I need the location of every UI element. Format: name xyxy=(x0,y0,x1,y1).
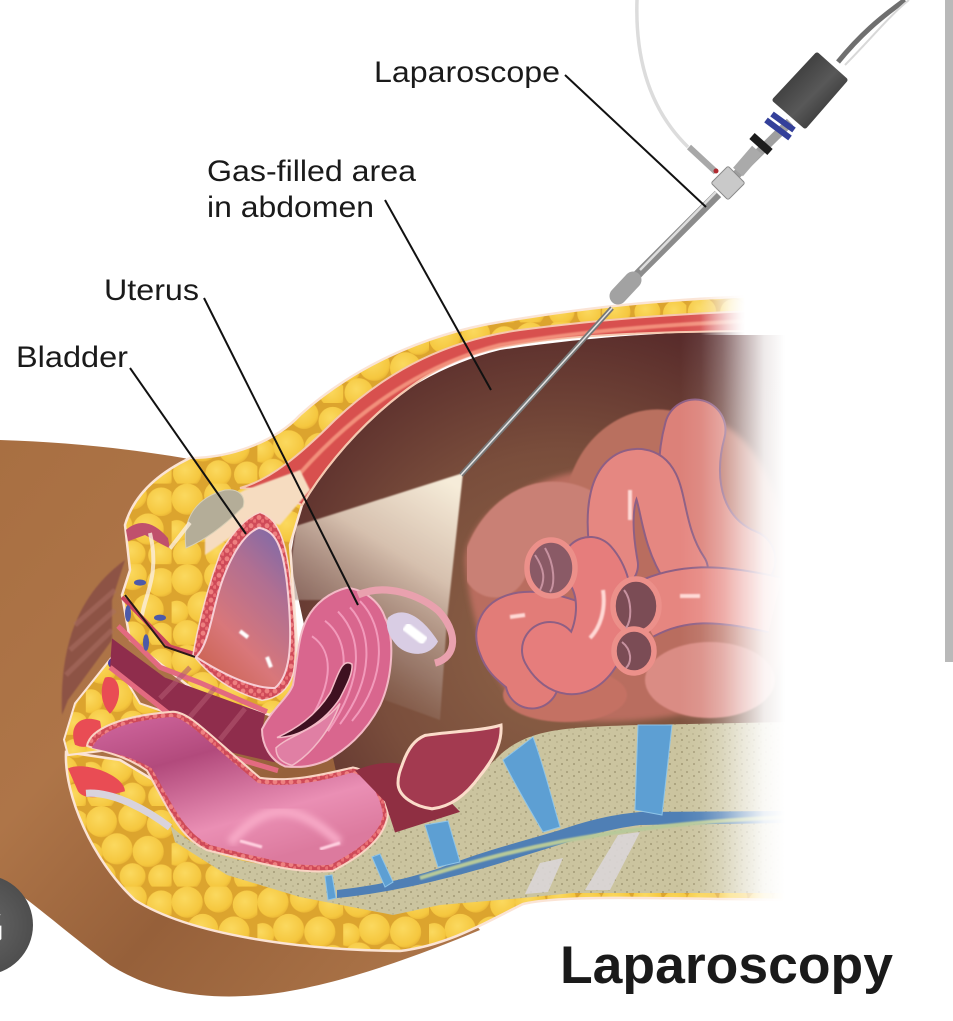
camera head xyxy=(775,55,845,126)
gas connector xyxy=(689,147,716,172)
small veins xyxy=(125,579,166,651)
bowel cut ends xyxy=(527,540,659,673)
intervertebral discs xyxy=(325,725,672,900)
back bowel mass xyxy=(465,414,790,722)
label: Bladder: Bladder xyxy=(16,341,128,374)
back bowel loops xyxy=(495,434,775,722)
sidebar strip xyxy=(945,0,953,662)
perineal fat and vessels xyxy=(64,657,170,827)
patient body skin xyxy=(0,440,480,996)
bowel loop front left xyxy=(503,618,565,682)
sigmoid colon xyxy=(355,725,501,833)
sacrum and spine xyxy=(170,722,790,915)
pale ligament gaps xyxy=(525,832,640,894)
bowel loop horizontal xyxy=(640,595,775,612)
fascia strands xyxy=(142,523,190,616)
bowel loop top xyxy=(611,472,685,570)
scope core xyxy=(728,122,790,183)
title: Laparoscopy xyxy=(560,936,894,995)
scope light cone xyxy=(286,473,463,720)
pale tendon xyxy=(205,470,310,555)
vagina wall xyxy=(110,597,278,771)
uterus xyxy=(262,588,391,767)
trocar sleeve xyxy=(625,194,718,288)
abdominal cavity xyxy=(290,330,800,840)
inner bowel folds xyxy=(535,548,630,668)
label: Gas-filled area in abdomen: Gas-filled area xyxy=(207,155,416,188)
spinal canal xyxy=(337,811,790,898)
bowel loop right xyxy=(689,430,745,560)
camera cable xyxy=(838,0,905,62)
bladder xyxy=(193,512,295,700)
label: Gas-filled area in abdomen: in abdomen xyxy=(207,191,374,224)
right fade to white xyxy=(680,285,845,935)
ovary and fallopian tube xyxy=(358,590,453,663)
label: Laparoscope: Laparoscope xyxy=(374,56,560,89)
uterine cavity xyxy=(277,663,352,738)
label: Uterus xyxy=(104,274,358,605)
pelvic organs xyxy=(64,512,501,871)
white gas tube xyxy=(637,0,688,147)
pubic detail xyxy=(126,523,170,548)
nerve bundle xyxy=(420,817,790,878)
cervix lip xyxy=(276,703,340,765)
bladder highlight xyxy=(240,631,271,667)
label: Gas-filled area in abdomen xyxy=(207,155,491,390)
bowel loop center xyxy=(550,565,604,666)
upper cylinder xyxy=(738,150,757,172)
rectum xyxy=(87,712,388,871)
blue coupler xyxy=(766,114,794,138)
laparoscope instrument xyxy=(461,0,909,475)
small intestine xyxy=(465,414,790,722)
black knob xyxy=(752,136,770,152)
urethra tube xyxy=(125,595,195,657)
lower fat layer xyxy=(66,752,790,951)
label: Laparoscope xyxy=(374,56,706,207)
label: Uterus: Uterus xyxy=(104,274,199,307)
red abdominal muscle xyxy=(240,310,790,505)
hex joint xyxy=(711,166,745,200)
bowel highlights xyxy=(510,490,700,638)
label: Bladder xyxy=(16,341,246,534)
external genital shading xyxy=(62,560,125,715)
corner badge xyxy=(0,875,33,975)
scope shaft xyxy=(461,308,612,475)
abdominal wall and pelvic fat xyxy=(122,295,790,715)
pubic bone xyxy=(185,490,244,548)
muscle highlight xyxy=(290,320,790,485)
